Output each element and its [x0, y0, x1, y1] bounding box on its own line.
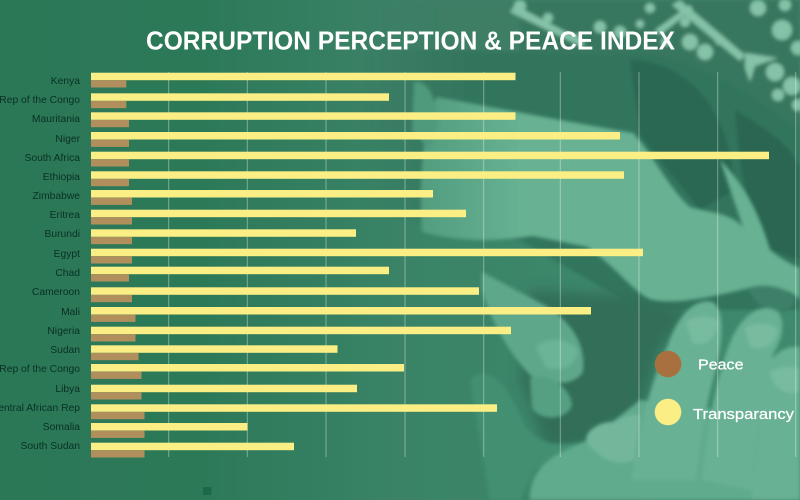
- country labels: Mali: [61, 307, 80, 318]
- country labels: South Sudan: [20, 441, 80, 452]
- pale back of hand: [412, 82, 438, 150]
- transparency bars: [91, 73, 769, 450]
- country labels: South Africa: [24, 153, 80, 164]
- legend: [655, 351, 795, 425]
- country labels: Egypt: [54, 249, 80, 260]
- country labels: Eritrea: [50, 210, 80, 221]
- upper dark hand: [360, 50, 800, 310]
- country labels: Mauritania: [32, 114, 80, 125]
- backdrop behind hands: [300, 0, 800, 130]
- thumb: [482, 272, 583, 383]
- country labels: Chad: [55, 268, 80, 279]
- patterned fabric: [510, 0, 800, 111]
- second fingertip: [530, 377, 572, 417]
- lower left mid-tone hand: [470, 374, 590, 500]
- fingernails: [686, 316, 719, 344]
- country labels: Sudan: [50, 345, 80, 356]
- small fingertip: [586, 414, 640, 463]
- country labels: Rep of the Congo: [0, 364, 80, 375]
- lower dark gap region: [520, 290, 690, 450]
- middle light hand: [421, 97, 800, 301]
- lower hand palm: [530, 400, 800, 500]
- legend: peace: Peace: [698, 356, 744, 374]
- country labels: Libya: [55, 384, 80, 395]
- country labels: Zimbabwe: [32, 191, 80, 202]
- peace bars: [91, 80, 144, 458]
- legend: transparency: Transparancy: [693, 406, 795, 423]
- country labels: Burundi: [44, 229, 80, 240]
- country labels: Kenya: [51, 76, 80, 87]
- country labels: Niger: [55, 134, 81, 145]
- country labels: Rep of the Congo: [0, 95, 80, 106]
- country labels: [0, 76, 81, 452]
- country labels: Nigeria: [47, 326, 80, 337]
- country labels: Cameroon: [32, 287, 80, 298]
- title: CORRUPTION PERCEPTION & PEACE INDEX: [146, 26, 676, 56]
- country labels: Ethiopia: [43, 172, 80, 183]
- bar chart: [0, 72, 796, 458]
- photo background: clasped hands: [300, 0, 800, 310]
- small square marker: [203, 487, 212, 495]
- fingertip over pinch: [747, 286, 795, 311]
- lower fingers: [632, 301, 722, 480]
- country labels: Somalia: [43, 422, 80, 433]
